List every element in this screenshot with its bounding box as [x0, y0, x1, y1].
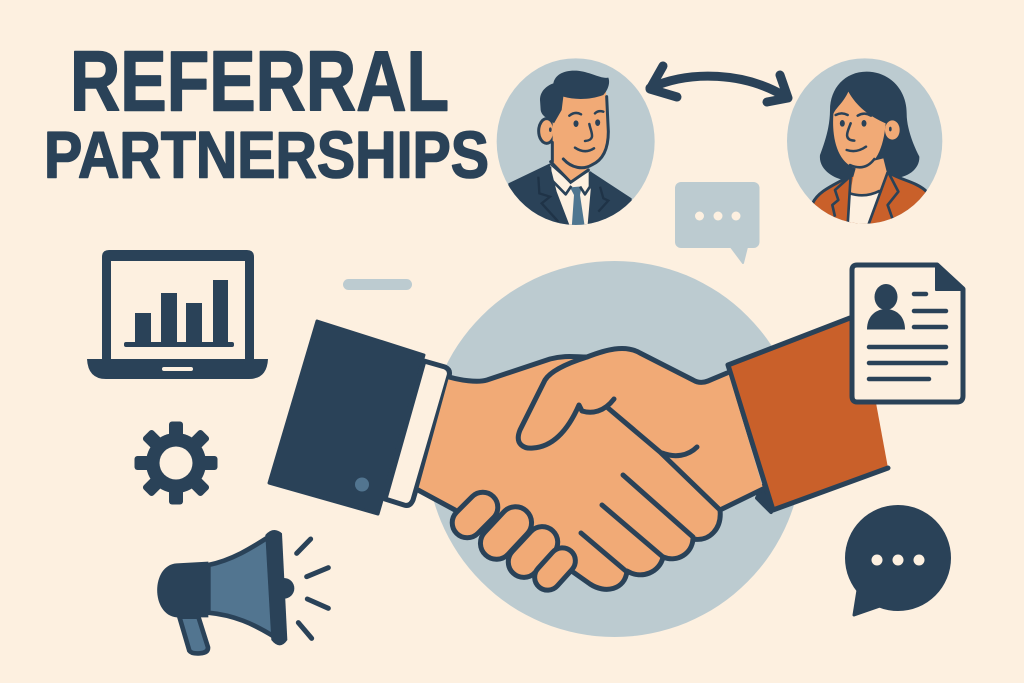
small pill accent	[343, 279, 412, 290]
resume document	[852, 265, 963, 402]
gripping fingers	[446, 486, 581, 596]
right orange sleeve	[728, 316, 888, 512]
speech bubble: light	[675, 182, 760, 263]
double-headed arrow between partners	[650, 66, 788, 102]
sleeve button	[355, 478, 369, 492]
left suit sleeve	[269, 321, 424, 514]
speech bubble: dark	[845, 505, 951, 615]
gear icon	[134, 422, 218, 504]
clasped hands	[418, 348, 763, 589]
title line two: PARTNERSHIPS	[44, 118, 489, 192]
white shirt cuff	[385, 361, 450, 505]
title line one: REFERRAL	[70, 34, 449, 130]
hand outlines	[418, 348, 763, 589]
profile silhouette	[867, 284, 905, 330]
background circle	[426, 261, 802, 637]
document text lines	[869, 294, 946, 379]
portrait: woman in orange blazer	[787, 58, 942, 232]
bar chart	[124, 280, 234, 347]
portrait: man in suit	[497, 58, 655, 232]
handshake	[269, 316, 888, 596]
title	[44, 34, 489, 192]
megaphone icon	[157, 530, 328, 653]
folded corner	[936, 266, 963, 290]
infographic canvas	[47, 50, 966, 656]
laptop with bar chart icon	[87, 250, 268, 379]
